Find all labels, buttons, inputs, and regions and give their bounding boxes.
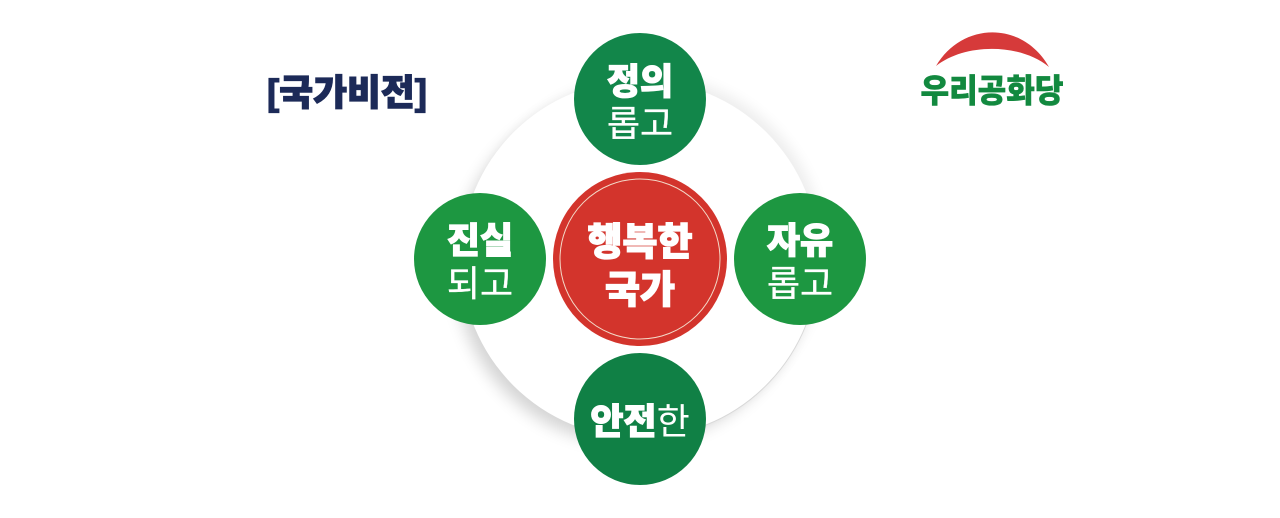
node: freedom: 자유 bbox=[767, 220, 833, 261]
node: truth: 진실 bbox=[447, 220, 513, 261]
node: freedom bbox=[734, 193, 866, 325]
node: freedom: 롭고 bbox=[767, 263, 833, 304]
center: happy nation: 국가 bbox=[605, 270, 675, 312]
background disc with soft shadow bbox=[455, 76, 823, 444]
center: happy nation: 행복한 bbox=[588, 222, 692, 264]
node: justice: 롭고 bbox=[607, 103, 673, 144]
logo: Uri Republican Party bbox=[921, 32, 1064, 109]
node: safety bbox=[574, 353, 706, 485]
node: safety: 안전한 bbox=[590, 401, 690, 442]
node: justice bbox=[574, 33, 706, 165]
logo wordmark: 우리공화당 bbox=[921, 72, 1064, 109]
node: truth: 되고 bbox=[447, 263, 513, 304]
heading: national vision: [국가비전] bbox=[267, 72, 427, 113]
logo arc bbox=[936, 32, 1049, 67]
center: happy nation bbox=[553, 172, 727, 346]
node: truth bbox=[414, 193, 546, 325]
diagram: national vision circles bbox=[414, 33, 866, 485]
node: justice: 정의 bbox=[607, 61, 673, 102]
